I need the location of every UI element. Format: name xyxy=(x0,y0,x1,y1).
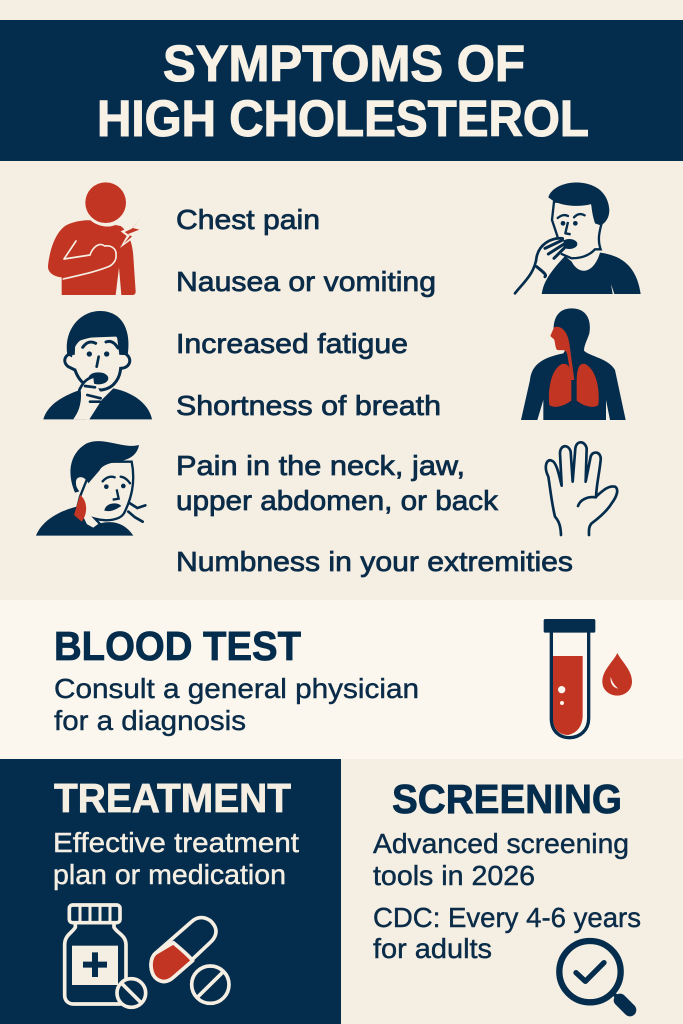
symptom list: Nausea or vomiting xyxy=(176,266,436,297)
icon: test tube and blood drop xyxy=(544,619,632,738)
title xyxy=(97,35,589,147)
icon: fatigue xyxy=(43,311,152,419)
symptom list: upper abdomen, or back xyxy=(176,485,499,516)
title: SYMPTOMS OF xyxy=(163,35,525,92)
screening description xyxy=(373,828,641,964)
icon: nausea xyxy=(515,183,641,294)
icon: lungs xyxy=(521,308,626,420)
heading: treatment: TREATMENT xyxy=(54,775,291,821)
header banner xyxy=(0,20,683,161)
heading: screening: SCREENING xyxy=(392,776,622,822)
blood test description: for a diagnosis xyxy=(54,705,246,736)
symptom list: Chest pain xyxy=(176,204,320,235)
screening description: tools in 2026 xyxy=(373,860,535,891)
screening description: for adults xyxy=(373,933,492,964)
panel: symptoms xyxy=(0,161,683,600)
icon: numb hand xyxy=(546,442,617,535)
icon: magnifier with check xyxy=(559,941,630,1010)
icon: pill bottle and capsule xyxy=(65,905,229,1007)
symptom list: Pain in the neck, jaw, xyxy=(176,450,465,481)
heading: blood test: BLOOD TEST xyxy=(54,623,301,669)
title: HIGH CHOLESTEROL xyxy=(97,90,589,147)
panel: treatment xyxy=(0,759,341,1024)
icon: chest pain xyxy=(48,182,144,295)
treatment description: plan or medication xyxy=(53,859,286,890)
symptom list: Increased fatigue xyxy=(176,328,408,359)
panel: screening xyxy=(341,759,683,1024)
treatment description: Effective treatment xyxy=(53,827,299,858)
blood test description xyxy=(54,673,419,736)
treatment description xyxy=(53,827,299,890)
blood test description: Consult a general physician xyxy=(54,673,419,704)
screening description: CDC: Every 4-6 years xyxy=(373,902,641,933)
symptom list: Numbness in your extremities xyxy=(176,546,573,577)
symptom list: Shortness of breath xyxy=(176,390,441,421)
icon: neck and jaw pain xyxy=(36,441,145,536)
panel: blood test xyxy=(0,600,683,759)
symptom list xyxy=(176,204,573,577)
screening description: Advanced screening xyxy=(373,828,629,859)
